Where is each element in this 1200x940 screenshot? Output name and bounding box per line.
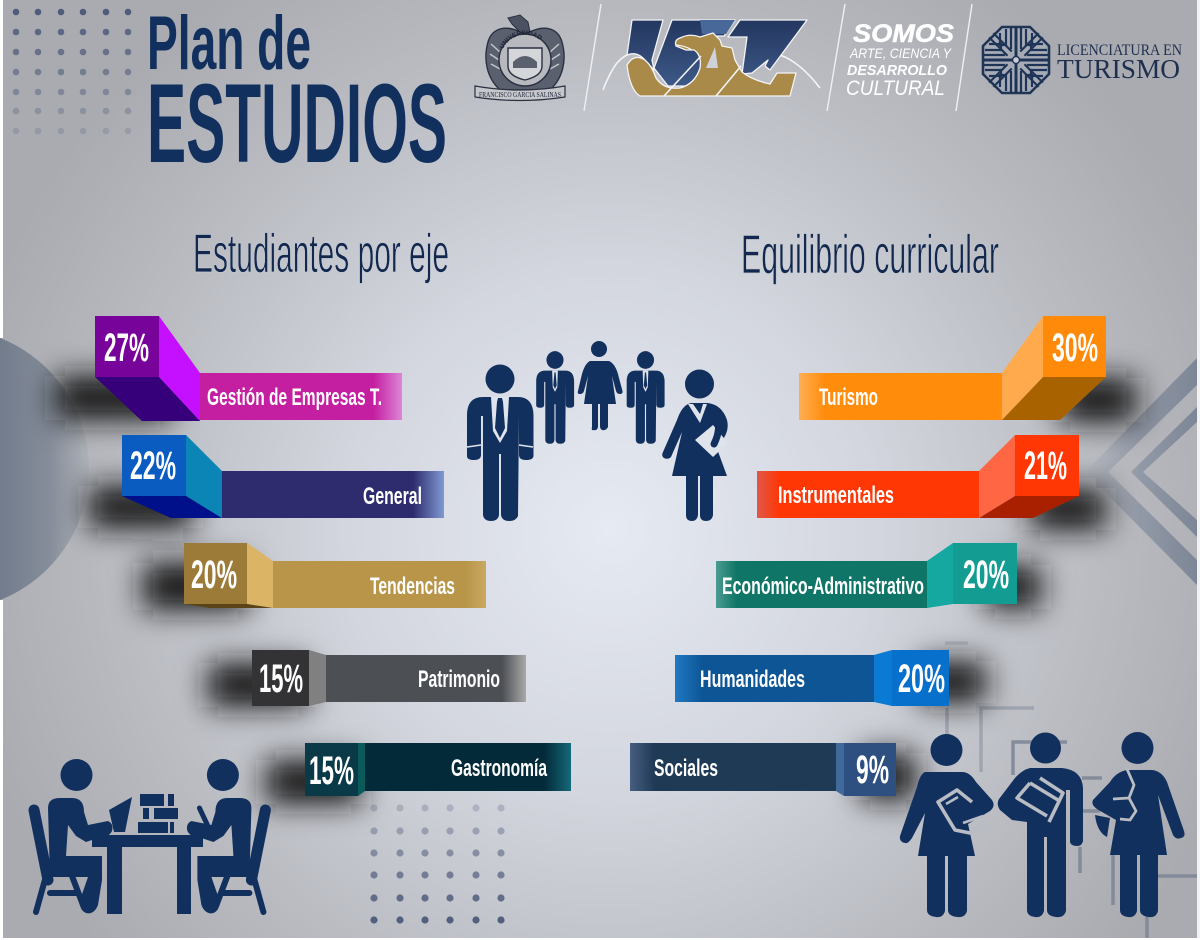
bar: Gastronomía 15%: 15% [309, 749, 354, 793]
bar: Económico-Administrativo 20%: Económico-Administrativo [722, 573, 924, 600]
bar: Sociales 9% [630, 743, 896, 796]
icon: student writing [187, 759, 265, 913]
bar: Patrimonio 15%: 15% [259, 657, 303, 701]
icon: octagonal emblem [983, 27, 1049, 93]
bar: Sociales 9%: Sociales [654, 755, 718, 782]
bar: General 22%: 22% [130, 444, 176, 488]
bar: Patrimonio 15%: Patrimonio [418, 666, 500, 693]
logo: UAZ [603, 20, 820, 96]
bar: Patrimonio 15% [252, 650, 526, 706]
bar drop shadows [55, 376, 1136, 804]
logo: Licenciatura en Turismo: TURISMO [1057, 54, 1180, 84]
bar: Instrumentales 21%: Instrumentales [778, 482, 894, 509]
logo: Licenciatura en Turismo: LICENCIATURA EN [1057, 42, 1182, 59]
bar: Tendencias 20%: Tendencias [370, 573, 455, 600]
heading: Equilibrio curricular: Equilibrio curricular [741, 223, 999, 285]
icon: small man right [627, 351, 665, 444]
bar: Gastronomía 15% [305, 743, 571, 796]
bar: General 22%: General [363, 483, 422, 510]
decorative semicircle [0, 328, 89, 610]
icon: large man [467, 364, 534, 521]
decorative line pattern [945, 643, 1197, 938]
slogan: Somos arte, ciencia y desarrollo cultural: CULTURAL [846, 77, 945, 100]
bar: Gastronomía 15%: Gastronomía [451, 755, 547, 782]
bar: Humanidades 20%: 20% [898, 657, 945, 701]
icon: student with bag right [1092, 732, 1185, 917]
title: ESTUDIOS [147, 61, 447, 186]
bar: Turismo 30% [799, 316, 1106, 420]
icon: large woman with clipboard [662, 370, 728, 521]
bar: Gestión de Empresas T. 27%: Gestión de Empresas T. [207, 384, 382, 411]
icon: small woman [578, 341, 623, 430]
icon: table [92, 835, 203, 914]
icon: student with books left [900, 734, 994, 917]
bar: Tendencias 20% [184, 543, 486, 608]
bar: Tendencias 20%: 20% [191, 553, 237, 597]
icon: three students carrying books [900, 732, 1185, 917]
icon: student with books centre [998, 732, 1083, 917]
logo: university seal: UNIVERSIDAD [499, 30, 542, 48]
icon: central group of business people [467, 341, 728, 521]
bar: Económico-Administrativo 20% [716, 543, 1017, 608]
heading: Estudiantes por eje: Estudiantes por eje [193, 222, 449, 284]
bar: Económico-Administrativo 20%: 20% [963, 553, 1009, 597]
icon: stack of books [138, 794, 178, 833]
dot grid top left [13, 9, 131, 134]
decorative chevrons [1085, 358, 1197, 585]
bar: Sociales 9%: 9% [856, 748, 889, 792]
bar: Gestión de Empresas T. 27%: 27% [104, 326, 149, 370]
slogan: Somos arte, ciencia y desarrollo cultural: ARTE, CIENCIA Y [849, 45, 952, 61]
bar: Humanidades 20%: Humanidades [700, 666, 805, 693]
logo: university seal [474, 14, 566, 102]
bar: Humanidades 20% [675, 650, 949, 706]
slogan: Somos arte, ciencia y desarrollo cultural: DESARROLLO [847, 62, 947, 79]
logo: Licenciatura en Turismo [983, 27, 1182, 93]
slogan: Somos arte, ciencia y desarrollo cultural: SOMOS [853, 20, 954, 48]
bar: Gestión de Empresas T. 27% [95, 316, 402, 421]
bar: Turismo 30%: Turismo [819, 384, 878, 411]
slogan: Somos arte, ciencia y desarrollo cultural [846, 20, 954, 100]
bar: General 22% [122, 435, 444, 518]
dot grid bottom centre [370, 804, 505, 924]
logo: university seal: FRANCISCO GARCIA SALINAS [479, 90, 561, 99]
bar: Instrumentales 21%: 21% [1024, 444, 1067, 488]
bar: Instrumentales 21% [757, 435, 1079, 518]
icon: small man left [536, 351, 574, 444]
header separators [584, 4, 972, 111]
title: Plan de [147, 1, 311, 86]
title [147, 1, 447, 186]
bar: Turismo 30%: 30% [1052, 326, 1098, 370]
icon: two students at a table with books [34, 759, 265, 914]
icon: student reading [34, 759, 132, 913]
